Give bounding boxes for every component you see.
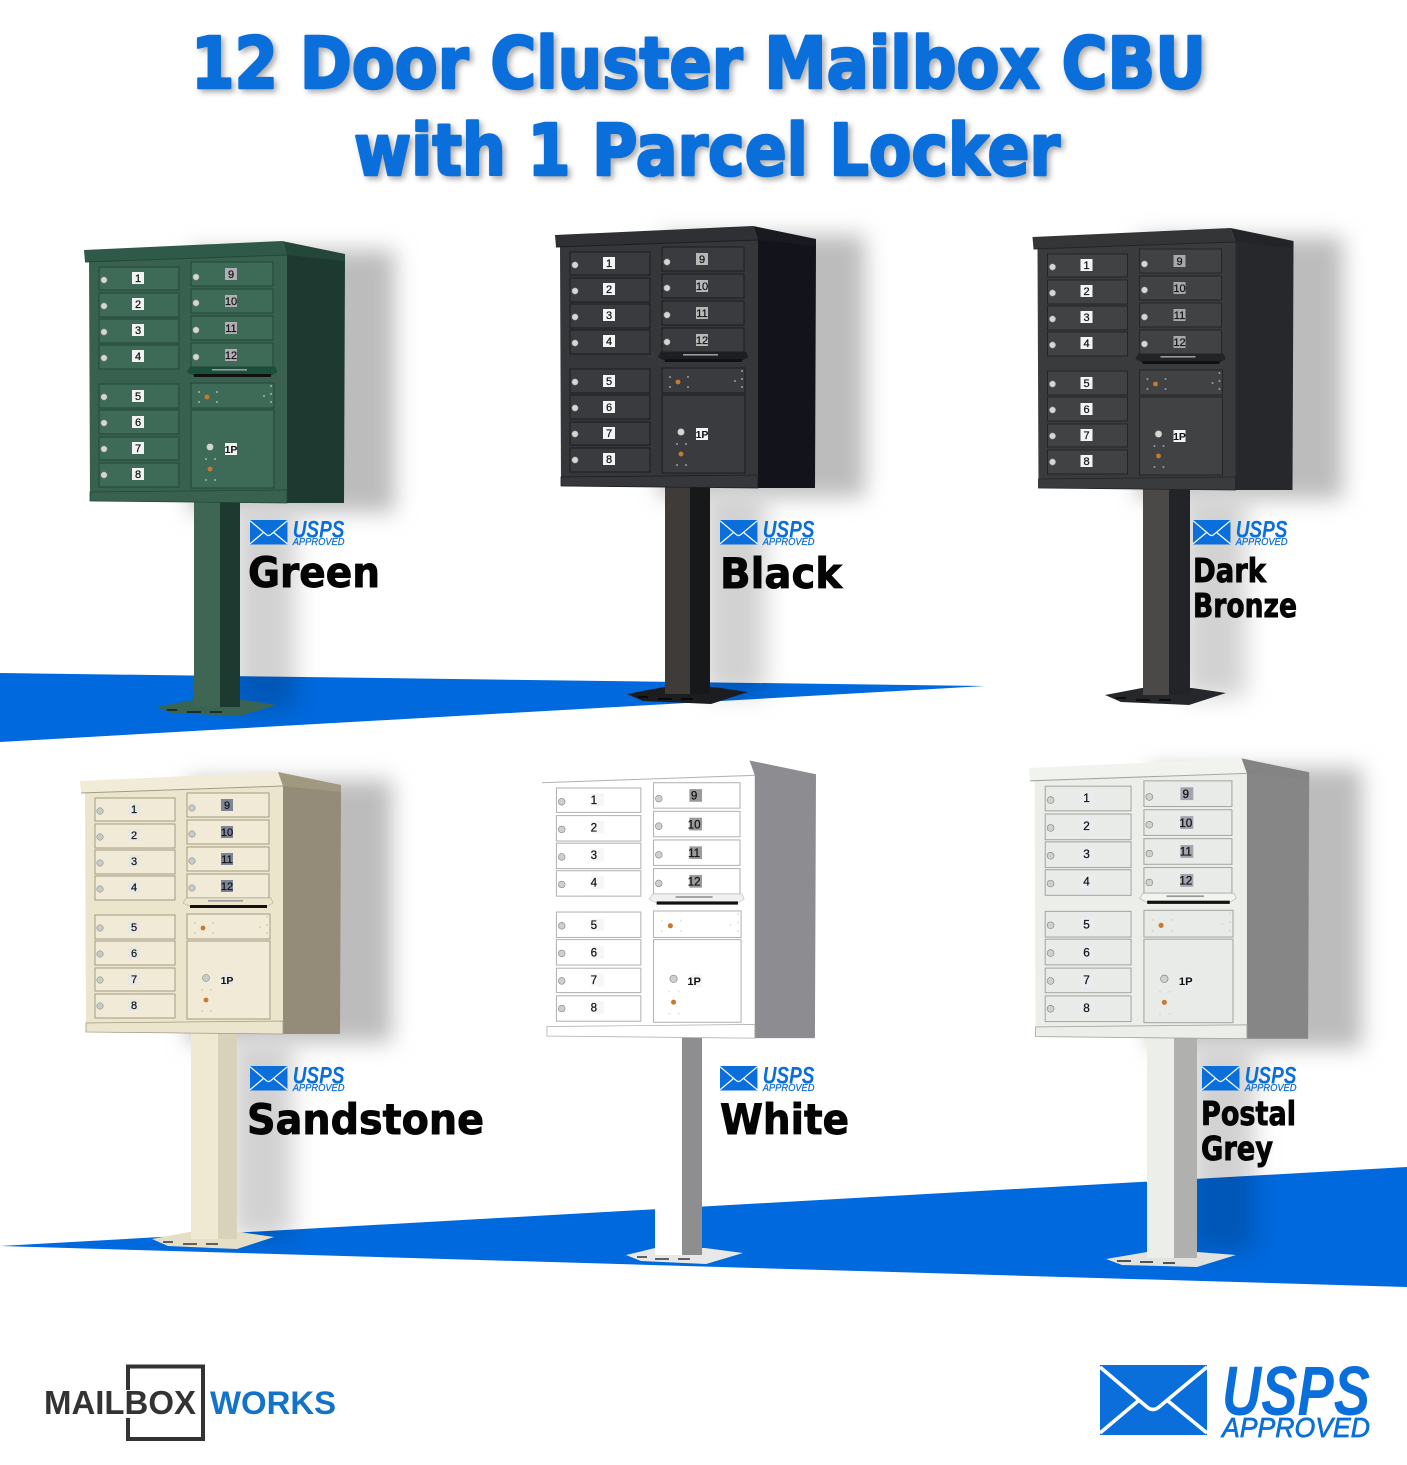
usps badge: white: USPS [763, 1063, 815, 1090]
mailbox: dark bronze [1032, 228, 1294, 705]
usps badge: green: APPROVED [292, 537, 345, 548]
door numbers: white: 2 [591, 821, 597, 834]
door numbers: white: 3 [591, 849, 597, 862]
door numbers: sandstone: 1P [221, 975, 233, 987]
door numbers: postal grey: 2 [1083, 820, 1090, 833]
title: 12 Door Cluster Mailbox CBU [191, 22, 1206, 105]
door numbers: green: 9 [228, 269, 234, 281]
door numbers: postal grey: 7 [1083, 974, 1090, 987]
logo: Mailbox Works: WORKS [210, 1385, 336, 1421]
usps badge: green [250, 516, 345, 548]
usps badge: green: USPS [293, 517, 345, 544]
door numbers: green: 8 [135, 469, 141, 481]
post and base plate: sandstone [152, 1032, 274, 1249]
door numbers: sandstone: 7 [131, 974, 137, 986]
door numbers: white: 6 [591, 947, 597, 960]
door numbers: black: 5 [606, 376, 612, 388]
logo: USPS Approved: USPS [1222, 1352, 1370, 1430]
post and base plate: postal grey [1106, 1036, 1236, 1267]
door numbers: sandstone: 2 [131, 830, 137, 842]
door numbers: postal grey: 5 [1083, 919, 1090, 931]
mailbox: postal grey [1029, 758, 1309, 1267]
door numbers: sandstone: 9 [224, 800, 230, 812]
door numbers: postal grey: 1 [1083, 792, 1090, 805]
logo: Mailbox Works [44, 1366, 336, 1439]
usps badge: black: USPS [763, 517, 815, 544]
mailbox: green [84, 241, 345, 716]
cabinet: dark bronze [1032, 228, 1294, 490]
mailbox: black [555, 226, 816, 704]
post and base plate: dark bronze [1105, 488, 1226, 705]
door numbers: white: 4 [591, 877, 598, 890]
title [191, 22, 1206, 192]
door numbers: dark bronze: 6 [1083, 404, 1090, 416]
cabinet: black [555, 226, 816, 488]
door numbers: green: 1 [135, 273, 141, 285]
door numbers: postal grey: 8 [1083, 1002, 1090, 1015]
door numbers: black [606, 254, 708, 466]
label: Dark Bronze: Dark [1193, 551, 1267, 590]
door numbers: sandstone: 11 [221, 854, 233, 866]
door numbers: black: 6 [606, 402, 612, 414]
door numbers: black: 3 [606, 310, 612, 322]
logo: USPS Approved: APPROVED [1220, 1412, 1370, 1443]
usps badge: postal grey [1202, 1062, 1297, 1094]
shadows behind the mailboxes [187, 235, 1362, 1252]
door numbers: sandstone: 4 [131, 882, 137, 894]
door numbers: black: 1P [696, 429, 708, 441]
door numbers: postal grey: 12 [1179, 875, 1192, 888]
door numbers: white: 11 [688, 847, 700, 860]
blue floor band, top row [0, 673, 985, 742]
door numbers: sandstone: 10 [221, 827, 233, 839]
door numbers: black: 7 [606, 428, 612, 440]
usps badge: black: APPROVED [762, 537, 815, 548]
door numbers: dark bronze: 1P [1173, 431, 1186, 443]
door numbers: green: 7 [135, 443, 141, 455]
door numbers: sandstone [131, 800, 233, 1012]
door numbers: postal grey: 1P [1179, 976, 1193, 988]
door numbers: black: 2 [606, 284, 612, 296]
door numbers: postal grey [1083, 788, 1193, 1015]
usps badge: dark bronze [1193, 516, 1288, 548]
door numbers: dark bronze: 2 [1083, 286, 1090, 298]
door numbers: green: 11 [225, 323, 237, 335]
label: White: White [720, 1095, 849, 1144]
logo: USPS Approved [1100, 1352, 1370, 1443]
label: Black: Black [720, 549, 843, 598]
post and base plate: black [627, 486, 748, 704]
label: Postal Grey: Postal [1201, 1094, 1296, 1133]
usps badge: dark bronze: USPS [1236, 517, 1288, 544]
cabinet: sandstone [80, 772, 341, 1034]
door numbers: dark bronze: 8 [1083, 456, 1090, 468]
usps badge: sandstone [250, 1062, 345, 1094]
door numbers: green: 3 [135, 325, 141, 337]
mailbox: white [541, 760, 816, 1264]
usps badge: sandstone: USPS [293, 1063, 345, 1090]
door numbers: postal grey: 6 [1083, 946, 1090, 959]
door numbers: black: 12 [696, 335, 708, 347]
door numbers: black: 1 [606, 258, 612, 270]
title: with 1 Parcel Locker [354, 109, 1060, 192]
door numbers: dark bronze: 11 [1174, 310, 1185, 322]
door numbers: green: 5 [135, 391, 141, 403]
door numbers: postal grey: 11 [1180, 846, 1192, 859]
door numbers: green: 4 [135, 351, 141, 363]
door numbers: sandstone: 8 [131, 1000, 137, 1012]
door numbers: green: 10 [225, 296, 237, 308]
door numbers: black: 9 [699, 254, 705, 266]
door numbers: white: 10 [688, 818, 701, 831]
door numbers: black: 4 [606, 336, 612, 348]
door numbers: white: 5 [591, 919, 597, 932]
door numbers: green: 2 [135, 299, 141, 311]
mailbox: sandstone [80, 772, 341, 1249]
door numbers: sandstone: 5 [131, 922, 137, 934]
blue floor band, bottom row [0, 1167, 1407, 1287]
usps badge: postal grey: USPS [1245, 1063, 1297, 1090]
label: Dark Bronze: Bronze [1193, 586, 1297, 625]
door numbers: dark bronze: 7 [1083, 430, 1090, 442]
door numbers: dark bronze [1083, 256, 1186, 468]
door numbers: white: 1P [687, 976, 701, 988]
door numbers: sandstone: 3 [131, 856, 137, 868]
usps badge: white [720, 1062, 815, 1094]
label: Green: Green [248, 548, 380, 597]
door numbers: white [591, 790, 701, 1015]
door numbers: dark bronze: 1 [1083, 260, 1090, 272]
door numbers: postal grey: 9 [1183, 788, 1189, 801]
label: Sandstone: Sandstone [247, 1095, 484, 1144]
door numbers: black: 10 [696, 281, 708, 293]
door numbers: green: 1P [225, 444, 237, 456]
cabinet: postal grey [1029, 758, 1309, 1039]
door numbers: postal grey: 3 [1083, 848, 1090, 861]
usps badge: white: APPROVED [762, 1083, 815, 1094]
door numbers: sandstone: 12 [221, 881, 233, 893]
door numbers: white: 8 [591, 1002, 597, 1015]
door numbers: sandstone: 1 [131, 804, 137, 816]
door numbers: green: 6 [135, 417, 141, 429]
post and base plate: white [626, 1036, 743, 1264]
door numbers: white: 9 [691, 790, 697, 803]
door numbers: green [135, 269, 237, 481]
door numbers: postal grey: 10 [1179, 817, 1193, 830]
door numbers: black: 8 [606, 454, 612, 466]
door numbers: white: 7 [591, 974, 597, 987]
door numbers: dark bronze: 10 [1173, 283, 1186, 295]
door numbers: black: 11 [696, 308, 708, 320]
usps badge: sandstone: APPROVED [292, 1083, 345, 1094]
door numbers: green: 12 [225, 350, 237, 362]
cabinet: green [84, 241, 345, 503]
door numbers: sandstone: 6 [131, 948, 137, 960]
label: Postal Grey: Grey [1201, 1129, 1273, 1168]
usps badge: black [720, 516, 815, 548]
post and base plate: green [156, 500, 277, 716]
door numbers: dark bronze: 9 [1176, 256, 1183, 268]
door numbers: dark bronze: 12 [1173, 337, 1186, 349]
label: Dark Bronze [1193, 551, 1297, 625]
door numbers: dark bronze: 3 [1083, 312, 1090, 324]
door numbers: white: 12 [688, 876, 701, 889]
door numbers: postal grey: 4 [1083, 876, 1090, 889]
door numbers: dark bronze: 4 [1083, 338, 1090, 350]
label: Postal Grey [1201, 1094, 1296, 1168]
usps badge: dark bronze: APPROVED [1235, 537, 1288, 548]
cabinet: white [541, 760, 816, 1038]
door numbers: dark bronze: 5 [1083, 378, 1090, 390]
door numbers: white: 1 [591, 794, 597, 807]
logo: Mailbox Works: MAILBOX [44, 1384, 196, 1421]
usps badge: postal grey: APPROVED [1244, 1083, 1297, 1094]
